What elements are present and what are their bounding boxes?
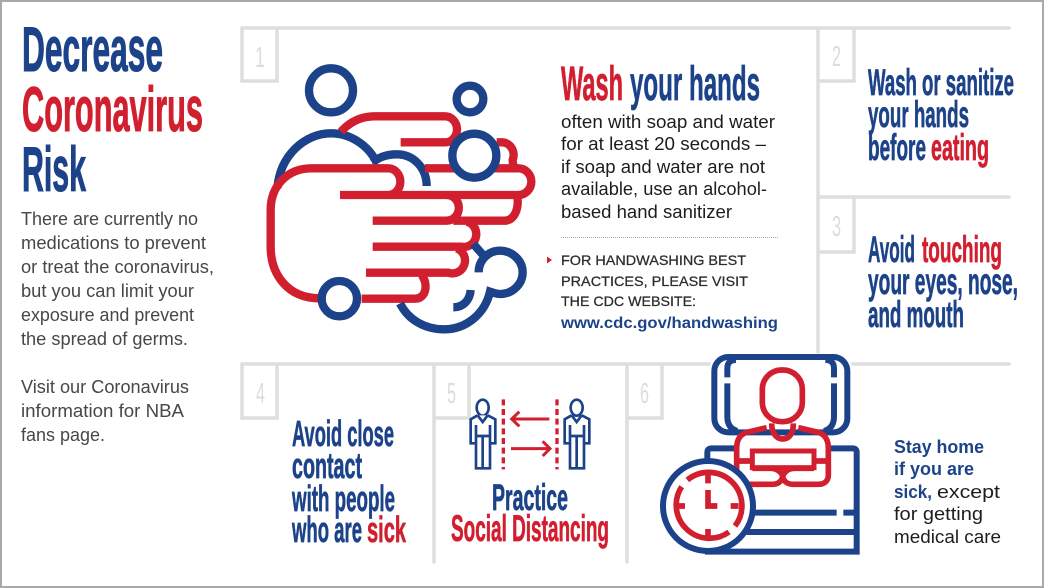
handwashing instructions: available, use an alcohol- (561, 179, 767, 199)
icon: red bullet (547, 256, 552, 264)
number badge 5: 5 (447, 378, 456, 410)
number badge 2: 2 (832, 41, 841, 73)
text: avoid close contact: who are (291, 509, 362, 550)
text: avoid touching: Avoid (868, 229, 915, 270)
text: stay home if sick: medical care (894, 527, 1001, 547)
CDC link callout: THE CDC WEBSITE: (561, 293, 696, 309)
CDC link callout: www.cdc.gov/handwashing (560, 315, 778, 332)
intro text: medications to prevent (21, 233, 206, 253)
text: stay home if sick: if you are (894, 459, 974, 479)
CDC link callout (560, 252, 778, 332)
intro text: or treat the coronavirus, (21, 257, 214, 277)
intro text: information for NBA (21, 401, 184, 421)
text: wash or sanitize: before (868, 127, 926, 168)
CDC link callout: FOR HANDWASHING BEST (561, 252, 746, 268)
text: Coronavirus (22, 75, 203, 145)
text: stay home if sick: except (937, 482, 1000, 502)
number badge 2 (820, 28, 854, 81)
heading: wash your hands: Wash (561, 58, 623, 111)
intro text (21, 209, 214, 445)
panel: step 6 (627, 353, 1001, 552)
heading: wash your hands (561, 58, 760, 111)
text: stay home if sick (894, 437, 1001, 547)
panel: step 5 (434, 364, 609, 549)
number badge 6: 6 (640, 378, 649, 410)
icon: washing hands (271, 68, 531, 329)
number badge 1: 1 (255, 42, 265, 74)
text: stay home if sick: for getting (894, 504, 983, 524)
text: practice social distancing (451, 477, 609, 549)
text: avoid close contact: contact (292, 445, 362, 486)
number badge 3: 3 (832, 211, 841, 243)
number badge 4: 4 (256, 378, 265, 410)
title (22, 15, 203, 205)
text: avoid close contact: with people (291, 478, 395, 519)
handwashing instructions: often with soap and water (561, 112, 775, 132)
text: wash or sanitize: eating (931, 127, 989, 168)
heading: wash your hands: your hands (630, 58, 760, 111)
number badge 1 (242, 28, 277, 81)
handwashing instructions: based hand sanitizer (561, 202, 732, 222)
title: Risk (22, 135, 86, 205)
text: practice social distancing: Social Distancing (451, 508, 609, 549)
text: avoid close contact: sick (367, 509, 407, 550)
text: avoid close contact (291, 413, 407, 550)
title: Decrease (22, 15, 163, 85)
intro text: but you can limit your (21, 281, 194, 301)
CDC link callout: PRACTICES, PLEASE VISIT (561, 273, 748, 289)
intro text: There are currently no (21, 209, 198, 229)
icon: person in bed with clock (663, 353, 857, 552)
number badge 6 (627, 364, 662, 418)
handwashing instructions (561, 112, 775, 222)
intro text: exposure and prevent (21, 305, 194, 325)
panel: step 4 (242, 364, 407, 550)
icon: social distancing people and arrows (471, 399, 589, 469)
number badge 3 (820, 197, 854, 252)
text: practice social distancing: Practice (492, 477, 568, 518)
intro text: the spread of germs. (21, 329, 188, 349)
panel: step 3 (820, 197, 1018, 335)
handwashing instructions: for at least 20 seconds – (561, 134, 766, 154)
panel: step 1 wash hands (242, 28, 779, 332)
text: wash or sanitize (868, 62, 1014, 168)
text: avoid close contact: Avoid close (292, 413, 394, 454)
panel: step 2 (820, 28, 1014, 168)
intro text: fans page. (21, 425, 105, 445)
intro text: Visit our Coronavirus (21, 377, 189, 397)
number badge 4 (242, 364, 277, 418)
handwashing instructions: if soap and water are not (561, 157, 765, 177)
text: stay home if sick: sick, (894, 482, 932, 502)
text: avoid touching (868, 229, 1018, 335)
text: stay home if sick: Stay home (894, 437, 984, 457)
number badge 5 (434, 364, 469, 418)
